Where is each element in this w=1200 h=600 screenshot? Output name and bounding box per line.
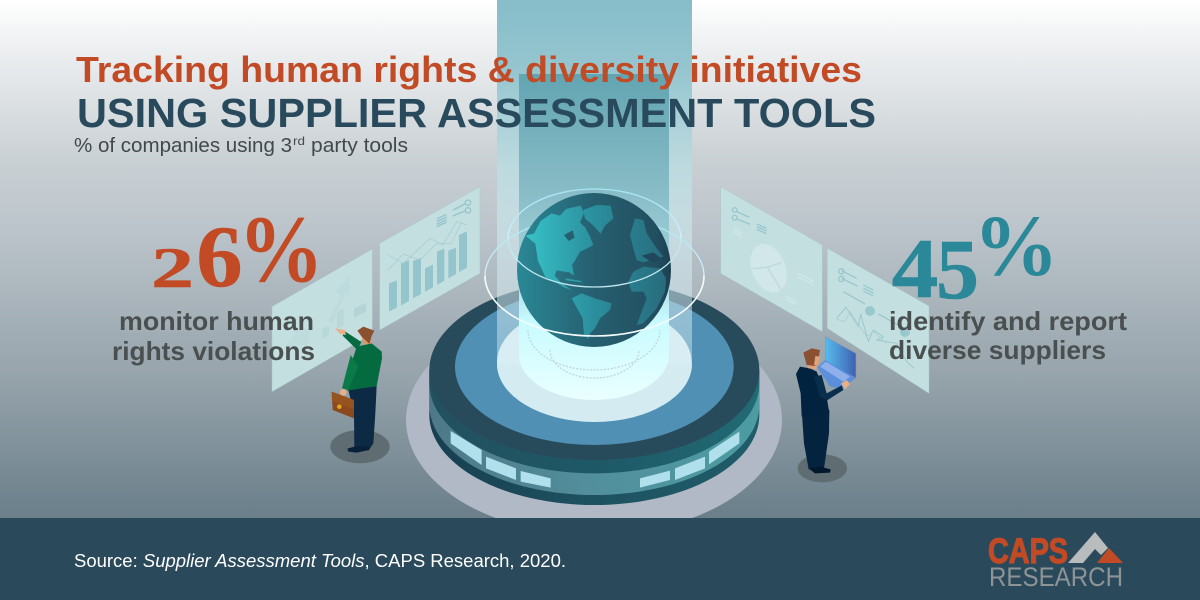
- panel: right chart screens: [721, 187, 929, 393]
- blue ring: [455, 288, 734, 445]
- continents: [525, 205, 666, 339]
- platform top surface: [429, 280, 759, 460]
- footer bar: [0, 518, 1200, 600]
- subtitle: rd: [293, 134, 305, 148]
- stat: 45 percent: %: [973, 197, 1059, 294]
- subtitle: [74, 134, 408, 157]
- label: monitor human rights violations: rights violations: [112, 336, 315, 366]
- panel: left chart screens: [272, 187, 480, 392]
- ground disc under platform: [406, 305, 782, 535]
- title line 2: USING SUPPLIER ASSESSMENT TOOLS: [77, 90, 876, 136]
- floor shadow: [330, 430, 390, 463]
- screen: rising arrow chart: [272, 249, 372, 392]
- screen: line trend and nodes: [827, 248, 929, 393]
- white disc lower rim over beam: [497, 364, 692, 422]
- figure: man holding laptop: [796, 337, 856, 482]
- screen: pie chart: [721, 187, 822, 332]
- screen: bar and line chart: [380, 187, 480, 330]
- floor shadow: [798, 454, 847, 482]
- stat: 45 percent: 4: [892, 222, 938, 316]
- logo: CAPS Research: [988, 532, 1123, 592]
- stat: 45 percent: 5: [936, 221, 979, 317]
- platform lit band: [429, 370, 759, 495]
- platform upper band: [429, 370, 759, 473]
- logo: CAPS Research: CAPS: [988, 532, 1068, 571]
- label: monitor human rights violations: monitor human: [119, 306, 314, 336]
- light beam outer column: [497, 0, 692, 366]
- white light disc: [497, 304, 692, 422]
- subtitle: % of companies using 3: [74, 134, 292, 157]
- source note: Source: Supplier Assessment Tools, CAPS Research, 2020.: [74, 550, 566, 571]
- subtitle: party tools: [311, 134, 408, 157]
- platform bottom band: [429, 370, 759, 505]
- orbit rings in front of globe: [485, 238, 704, 378]
- stat: 26 percent: [151, 196, 324, 306]
- platform windows: [451, 431, 739, 488]
- label: identify and report diverse suppliers: identify and report: [889, 306, 1127, 336]
- figure: man with briefcase pointing: [330, 327, 390, 463]
- globe: [517, 193, 671, 347]
- stat: 26 percent: 2: [151, 236, 194, 300]
- label: identify and report diverse suppliers: [889, 306, 1127, 365]
- briefcase: [332, 392, 354, 418]
- logo: CAPS Research: RESEARCH: [989, 562, 1123, 592]
- label: monitor human rights violations: [112, 306, 315, 366]
- laptop: [825, 337, 856, 378]
- orbit rings behind globe: [485, 189, 704, 336]
- stat: 26 percent: 6: [196, 208, 243, 306]
- stat: 26 percent: %: [238, 196, 324, 302]
- platform base: [429, 280, 759, 505]
- label: identify and report diverse suppliers: diverse suppliers: [889, 335, 1106, 365]
- title line 1: Tracking human rights & diversity initiatives: [76, 49, 862, 90]
- stat: 45 percent: [892, 197, 1059, 317]
- light beam inner column: [519, 74, 669, 400]
